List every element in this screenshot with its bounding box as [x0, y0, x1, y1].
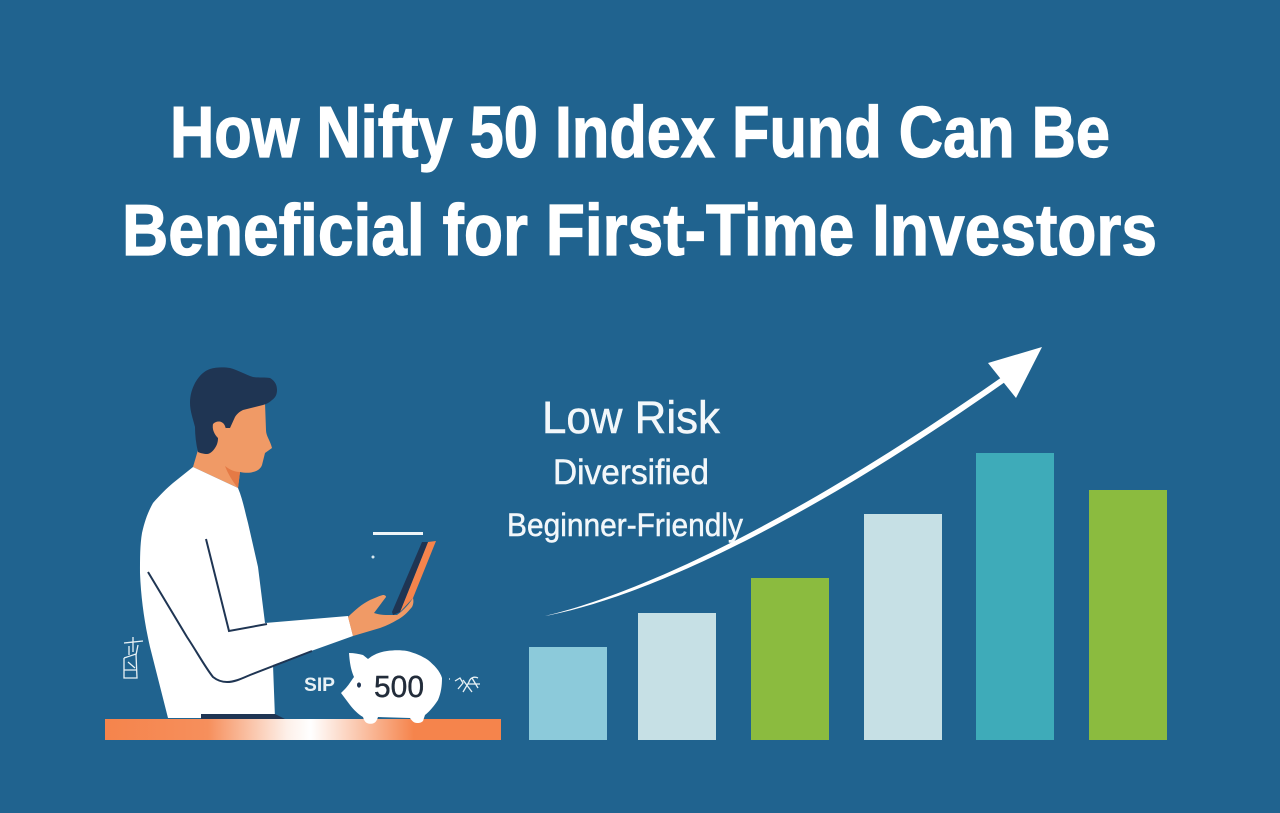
- phone back: [400, 541, 436, 612]
- screen line above phone: [373, 532, 423, 535]
- hand: [348, 595, 413, 636]
- neck shadow: [225, 466, 240, 488]
- neck and face: [193, 403, 272, 488]
- phone: [392, 542, 428, 615]
- title: Beneficial for First-Time Investors: [122, 191, 1157, 271]
- arm crease lines: [206, 539, 267, 631]
- title: How Nifty 50 Index Fund Can Be: [170, 93, 1110, 173]
- piggy value: 500: [374, 669, 424, 704]
- rupee glyph scribble left: [124, 637, 143, 678]
- benefit labels: [507, 392, 743, 543]
- illustration: person with phone: [140, 367, 436, 719]
- hair: [190, 367, 277, 454]
- ear: [213, 422, 226, 440]
- piggy eye: [357, 682, 361, 688]
- SIP label: SIP: [304, 675, 335, 696]
- title: [122, 93, 1157, 271]
- benefit labels: Beginner-Friendly: [507, 507, 743, 543]
- benefit labels: Low Risk: [542, 392, 720, 443]
- desk: [105, 719, 501, 740]
- benefit labels: Diversified: [553, 453, 709, 492]
- rupee glyph scribble right: [449, 677, 480, 692]
- dark base under person: [201, 714, 285, 719]
- torso and arm: [140, 467, 353, 718]
- bar chart: [529, 453, 1167, 740]
- growth arrow: [545, 347, 1042, 616]
- screen dot: [372, 556, 374, 558]
- piggy bank: [341, 650, 442, 724]
